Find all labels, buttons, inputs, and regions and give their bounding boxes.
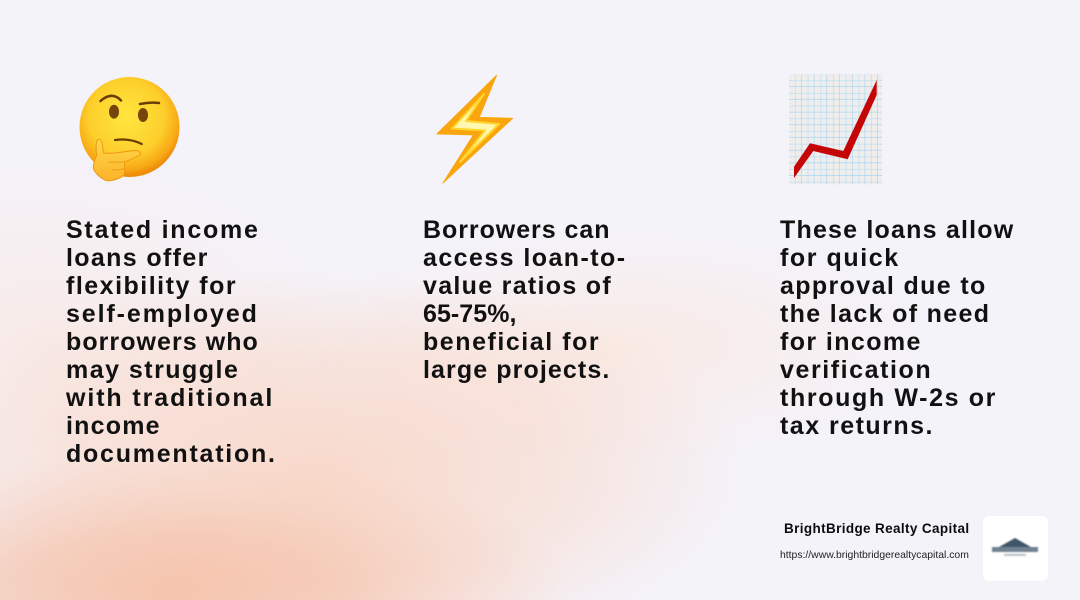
text block: flexibility: flexibility for xyxy=(66,272,237,300)
text block: flexibility: Stated income xyxy=(66,216,260,244)
company url: https://www.brightbridgerealtycapital.com xyxy=(780,550,969,561)
text block: flexibility: self-employed xyxy=(66,300,259,328)
text block: loan-to-value: Borrowers can xyxy=(423,216,610,244)
text block: flexibility: with traditional xyxy=(66,384,274,412)
text block: quick approval: for income xyxy=(780,328,922,356)
text block: flexibility xyxy=(66,216,277,468)
text block: flexibility: borrowers who xyxy=(66,328,259,356)
logo card xyxy=(983,516,1048,581)
text block: quick approval: verification xyxy=(780,356,932,384)
text block: loan-to-value: beneficial for xyxy=(423,328,600,356)
icon: lightning bolt xyxy=(436,74,514,184)
text block: loan-to-value xyxy=(423,216,626,384)
text block: quick approval: tax returns. xyxy=(780,412,934,440)
text block: flexibility: may struggle xyxy=(66,356,239,384)
text block: flexibility: loans offer xyxy=(66,244,209,272)
text block: flexibility: income xyxy=(66,412,161,440)
text block: loan-to-value: value ratios of xyxy=(423,272,612,300)
text block: loan-to-value: large projects. xyxy=(423,356,610,384)
text block: quick approval xyxy=(780,216,1014,440)
text block: quick approval: the lack of need xyxy=(780,300,990,328)
icon: company logo xyxy=(991,537,1039,557)
text block: quick approval: approval due to xyxy=(780,272,987,300)
icon: chart increasing xyxy=(789,74,882,184)
text block: flexibility: documentation. xyxy=(66,440,277,468)
company name: BrightBridge Realty Capital xyxy=(784,521,970,536)
text block: quick approval: These loans allow xyxy=(780,216,1014,244)
text block: loan-to-value: access loan-to- xyxy=(423,244,626,272)
icon: thinking face xyxy=(80,77,180,182)
text block: quick approval: through W-2s or xyxy=(780,384,997,412)
text block: quick approval: for quick xyxy=(780,244,900,272)
text block: loan-to-value: 65-75%, xyxy=(423,300,516,328)
